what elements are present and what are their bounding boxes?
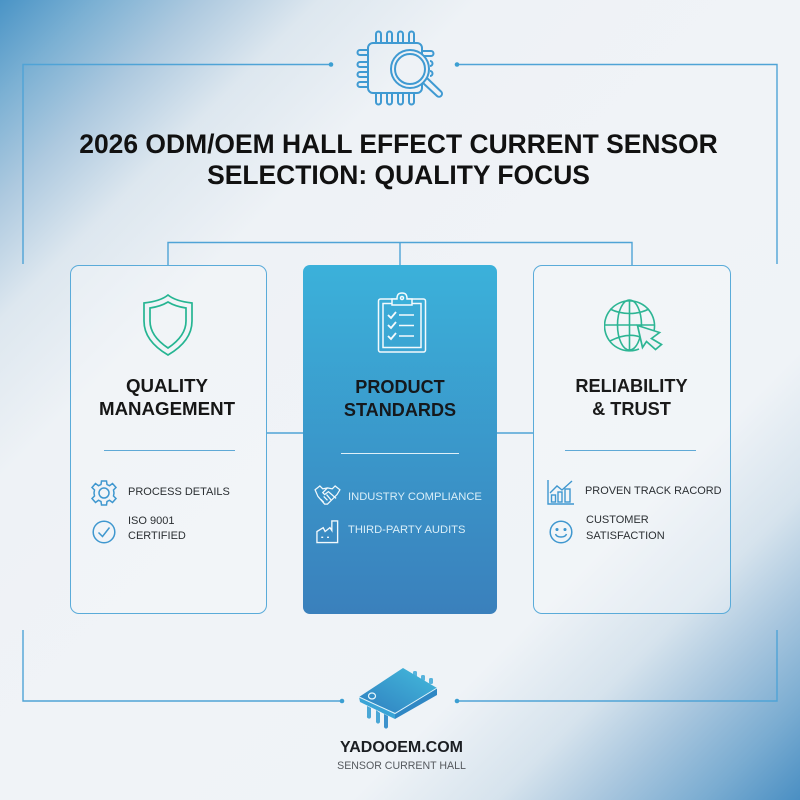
- heading: STANDARDS: [344, 400, 456, 420]
- label: industry compliance: INDUSTRY COMPLIANCE: [348, 490, 482, 502]
- tagline: SENSOR CURRENT HALL: [337, 760, 466, 772]
- icon: smiley: [549, 520, 573, 544]
- icon: gear: [91, 480, 117, 506]
- heading: QUALITY: [126, 375, 208, 396]
- label: customer satisfaction: SATISFACTION: [586, 530, 665, 542]
- icon: clipboard: [378, 292, 426, 353]
- label: process details: PROCESS DETAILS: [128, 486, 230, 498]
- heading: & TRUST: [592, 398, 671, 418]
- icon: handshake: [314, 485, 341, 505]
- title: SELECTION: QUALITY FOCUS: [207, 160, 590, 190]
- label: iso 9001 certified: CERTIFIED: [128, 530, 186, 542]
- brand name: YADOOEM.COM: [340, 738, 463, 756]
- heading: PRODUCT: [355, 376, 445, 396]
- panel: reliability and trust: [533, 265, 731, 614]
- heading: [99, 375, 235, 418]
- heading: [344, 376, 456, 420]
- title: [79, 129, 718, 190]
- icon: bar chart: [547, 480, 574, 505]
- heading: [575, 376, 688, 418]
- heading: RELIABILITY: [575, 376, 688, 396]
- title: 2026 ODM/OEM HALL EFFECT CURRENT SENSOR: [79, 129, 718, 159]
- label: proven track racord: PROVEN TRACK RACORD: [585, 485, 722, 497]
- icon: factory: [316, 520, 338, 544]
- icon: globe with cursor: [604, 299, 663, 352]
- label: iso 9001 certified: [128, 514, 186, 542]
- panel: product standards: [303, 265, 497, 614]
- divider: [565, 450, 696, 451]
- icon: check circle: [92, 520, 116, 544]
- icon: shield: [143, 294, 193, 356]
- label: third-party audits: THIRD-PARTY AUDITS: [348, 524, 465, 536]
- heading: MANAGEMENT: [99, 398, 235, 418]
- divider: [341, 453, 459, 454]
- label: customer satisfaction: CUSTOMER: [586, 514, 649, 526]
- label: customer satisfaction: [586, 514, 665, 542]
- divider: [104, 450, 235, 451]
- label: iso 9001 certified: ISO 9001: [128, 514, 174, 526]
- panel: quality management: [70, 265, 267, 614]
